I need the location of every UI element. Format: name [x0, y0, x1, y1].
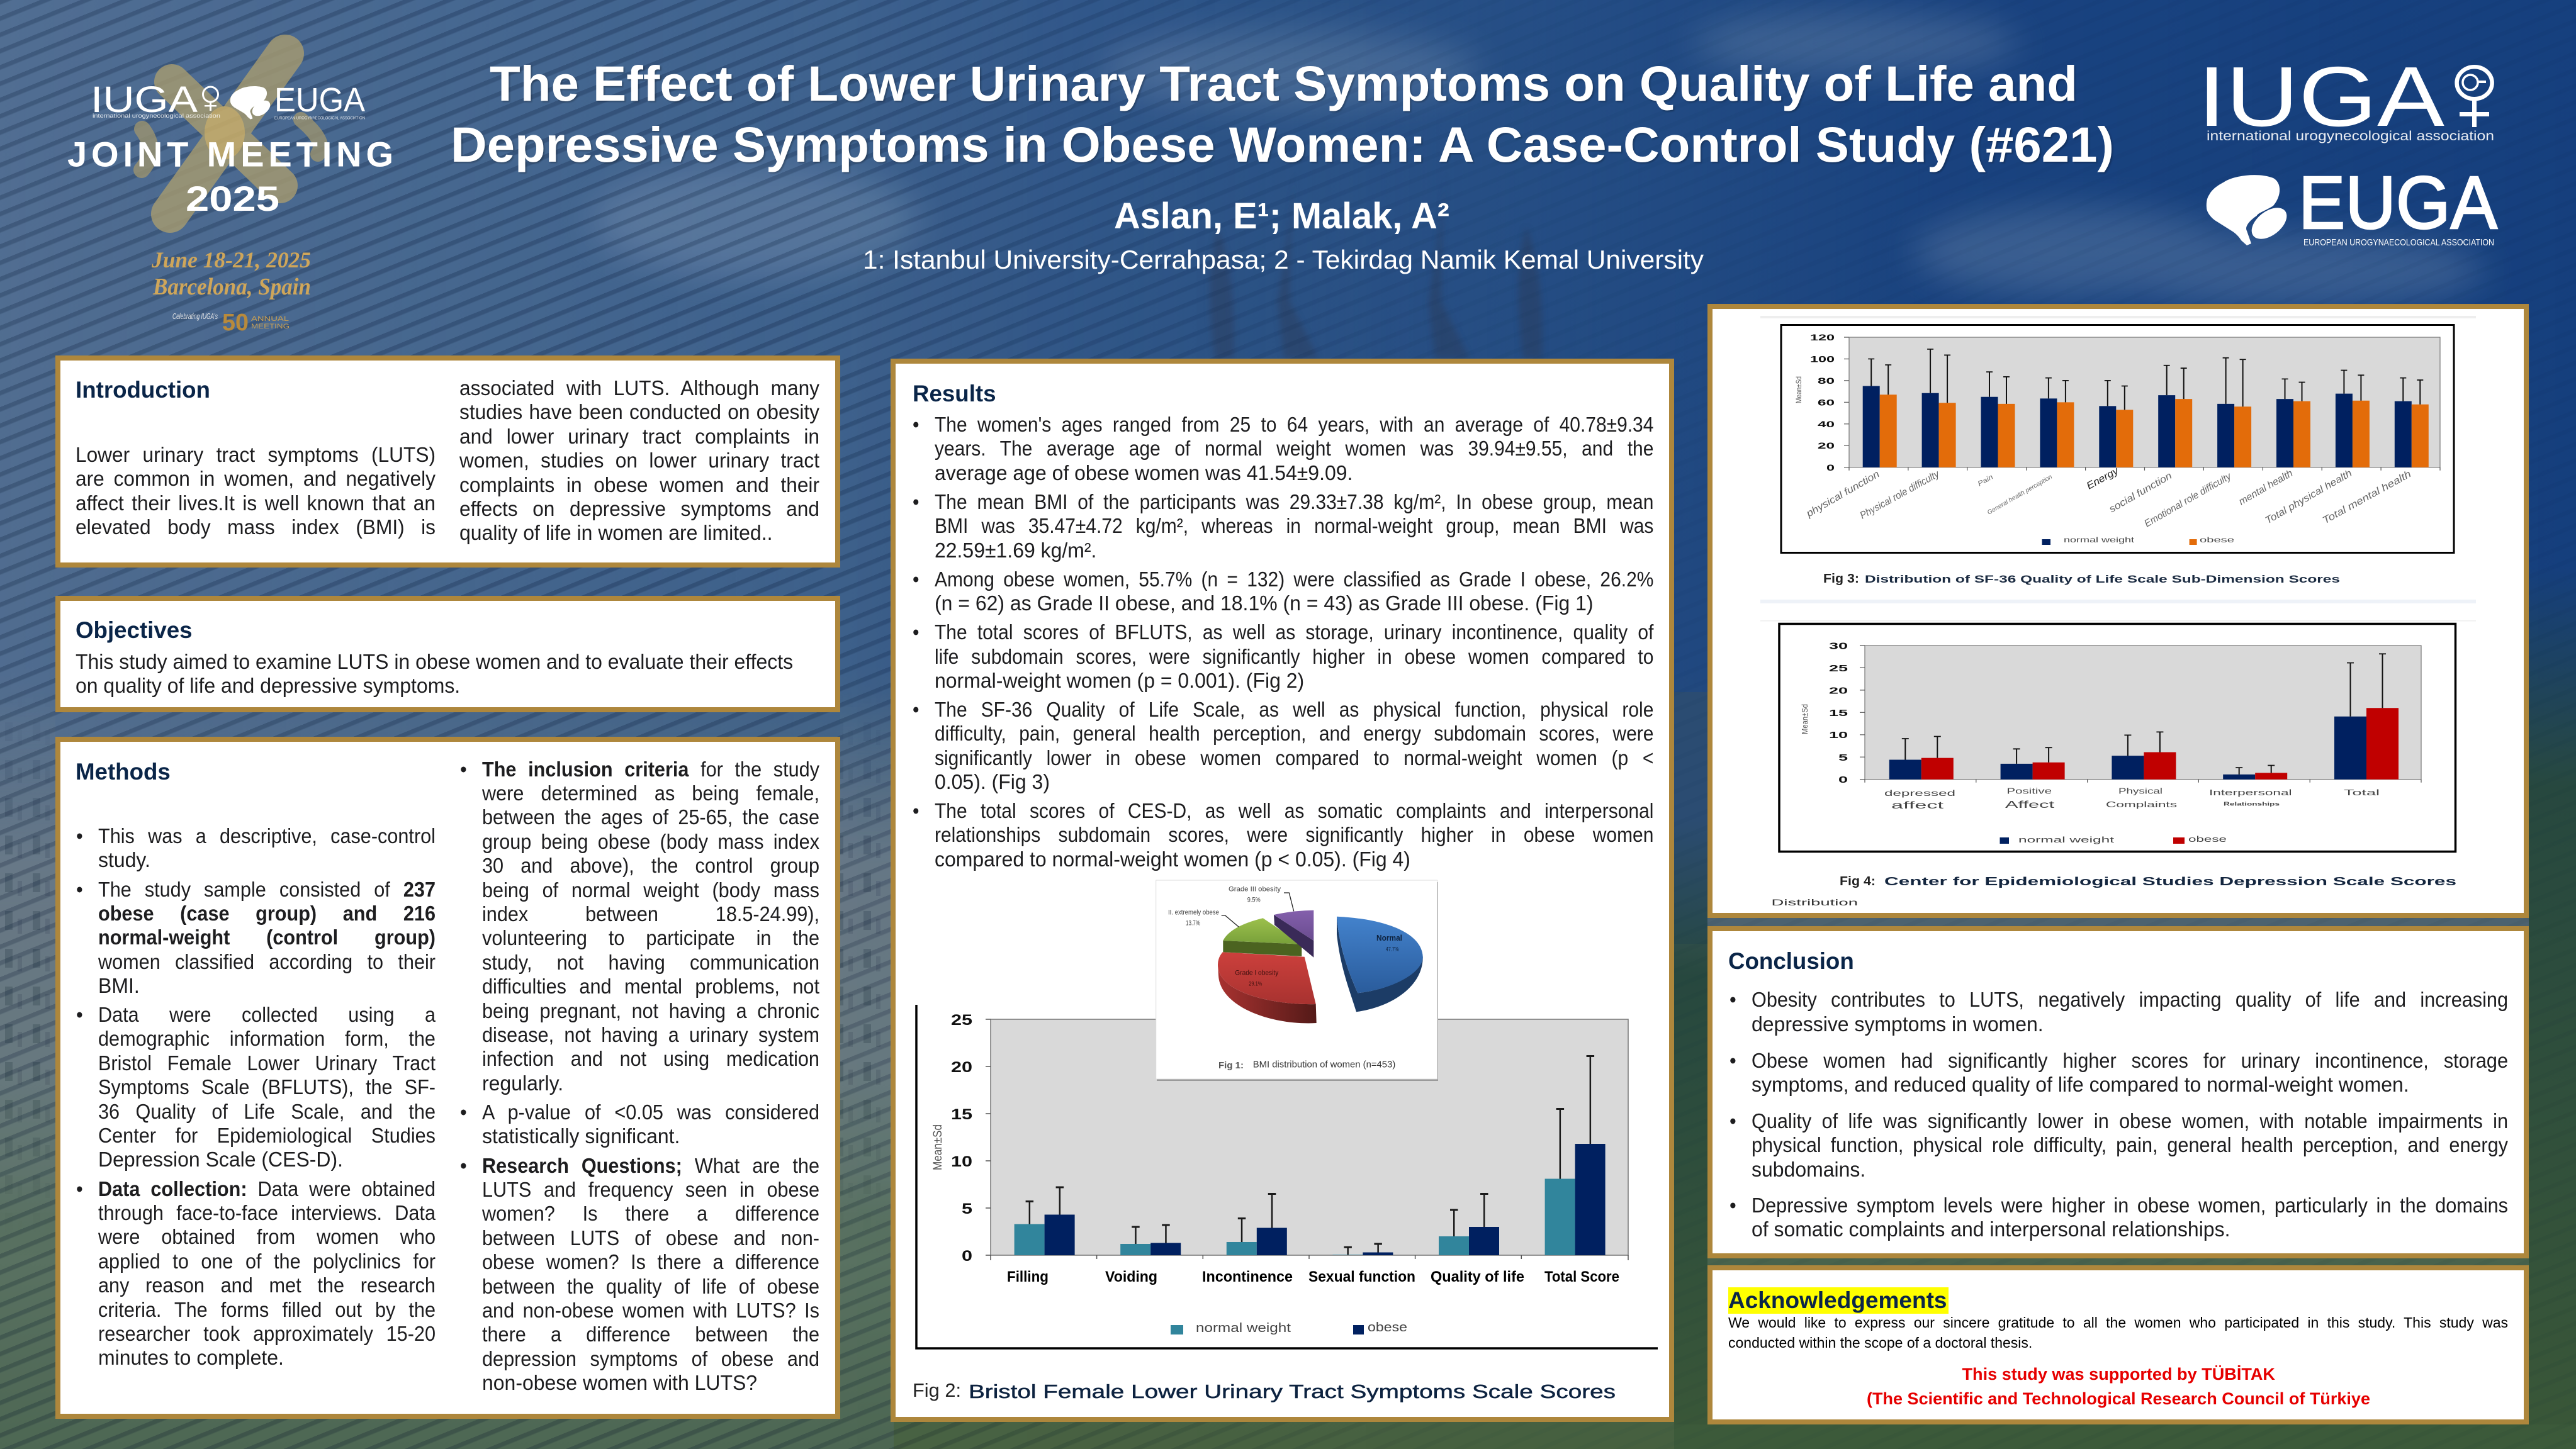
bullet: research questions: obese women? Is there a difference — [482, 1251, 819, 1274]
bullet: data collection: minutes to complete. — [98, 1346, 284, 1370]
legend: obese — [2188, 834, 2227, 844]
bullet: obesity grades — [935, 568, 1653, 617]
category labels: Positive — [2006, 786, 2052, 796]
bullet: obesity grades: Among obese women, 55.7% (n = 132) were classified as Grade I obese, 26.2% — [935, 568, 1653, 591]
y axis labels: 40 — [1818, 419, 1835, 429]
bullet: instruments: Center for Epidemiological Studies — [98, 1124, 436, 1148]
small EUGA wordmark: EUGA — [274, 81, 365, 119]
bullet: inclusion criteria: 30 and above), the control group — [482, 854, 819, 878]
y axis labels — [1829, 641, 1848, 785]
small EUGA wordmark — [230, 81, 365, 121]
heading: Objectives: Objectives — [76, 617, 193, 643]
panel: acknowledgements — [1707, 1265, 2529, 1424]
bars: normal weight — [1863, 386, 2412, 467]
bullet: higher scores: Obese women had significantly higher scores for urinary incontinence, storage — [1752, 1049, 2508, 1073]
bars: normal weight — [1889, 717, 2366, 780]
category labels: Filling — [1007, 1268, 1049, 1285]
caption: figure 4 — [1771, 875, 2456, 907]
panel: methods: • — [76, 825, 83, 848]
category labels: physical function — [1804, 469, 1882, 520]
small IUGA wordmark: IUGA — [91, 79, 198, 120]
caption: figure 2 — [913, 1379, 1616, 1402]
small EUGA wordmark: EUROPEAN UROGYNAECOLOGICAL ASSOCIATION — [274, 116, 365, 121]
text: introduction left column — [76, 444, 436, 539]
bullet: quality of life: subdomains. — [1752, 1158, 1865, 1182]
bullet: instruments: demographic information form, the — [98, 1027, 436, 1051]
y axis labels: 0 — [1838, 775, 1848, 785]
text: 50th annual meeting badge: 50 — [222, 310, 249, 336]
bullet: data collection: any reason and met the research — [98, 1274, 436, 1297]
pie slice: normal — [1337, 917, 1423, 1012]
bullet: BMI — [935, 491, 1653, 563]
legend — [1171, 1321, 1407, 1335]
chart: figure 1 BMI pie chart card — [1156, 880, 1438, 1081]
category labels: Affect — [2005, 800, 2055, 810]
y axis labels: 10 — [951, 1153, 972, 1170]
bullet: obesity contributes: Obesity contributes to LUTS, negatively impacting quality of life and increasing — [1752, 988, 2508, 1012]
text: 50th annual meeting badge: ANNUAL — [251, 315, 289, 323]
panel: methods: • — [460, 758, 467, 781]
heading: Results: Results — [913, 381, 996, 406]
bullet: p-value: statistically significant. — [482, 1125, 680, 1148]
text: funding note — [1867, 1365, 2370, 1408]
heading: Acknowledgements: Acknowledgements — [1728, 1287, 1947, 1313]
text: introduction right column: complaints in obese women and their — [459, 474, 819, 497]
bullet: study sample: women classified according to their — [98, 951, 436, 974]
pie slice: grade I obesity — [1218, 952, 1317, 1023]
bullet: inclusion criteria: regularly. — [482, 1072, 563, 1095]
panel: methods: • — [460, 1155, 467, 1178]
bullet: study sample — [76, 878, 436, 998]
bullet: study sample: BMI. — [98, 975, 140, 998]
bullet: BFLUTS — [935, 621, 1653, 694]
category labels: Pain — [1976, 473, 1994, 488]
conference logo: IUGA EUGA Joint Meeting 2025 — [67, 53, 393, 336]
caption: figure 2: Bristol Female Lower Urinary Tract Symptoms Scale Scores — [969, 1380, 1616, 1402]
bullet: study design: This was a descriptive, case-control — [98, 825, 436, 848]
bars: obese — [1921, 708, 2399, 780]
category labels: General health perception — [1986, 473, 2054, 517]
bullet: ages — [913, 413, 1653, 485]
text: introduction right column: effects on depressive symptoms and — [459, 498, 819, 521]
text: acknowledgements: We would like to express our sincere gratitude to all the women who participated in this study. This study was — [1728, 1314, 2508, 1331]
bullet: instruments — [76, 1004, 436, 1172]
text: objectives: on quality of life and depressive symptoms. — [76, 674, 460, 698]
panel: conclusion: • — [1730, 1049, 1736, 1073]
logo: EUGA: EUROPEAN UROGYNAECOLOGICAL ASSOCIATION — [2303, 237, 2494, 248]
text: Joint Meeting 2025: 2025 — [186, 179, 279, 218]
legend — [2042, 535, 2235, 545]
category labels: Total physical health — [2263, 468, 2354, 526]
pie labels: 29.1% — [1249, 981, 1262, 987]
bullet: inclusion criteria: between the ages of 25-65, the case — [482, 806, 819, 829]
y axis labels: 80 — [1818, 376, 1835, 386]
bullet: instruments: Symptoms Scale (BFLUTS), the SF- — [98, 1076, 436, 1099]
bullet: research questions: women? Is there a difference — [482, 1202, 819, 1226]
category labels: Interpersonal — [2209, 788, 2292, 797]
pie slice: grade III obesity — [1274, 910, 1313, 958]
bullet: CES-D — [935, 800, 1653, 872]
category labels: Physical — [2118, 786, 2163, 796]
panel: methods: • — [76, 1178, 83, 1200]
logo: IUGA: IUGA — [2198, 49, 2444, 144]
caption: figure 3: Distribution of SF-36 Quality of Life Scale Sub-Dimension Scores — [1865, 573, 2340, 585]
bullet: ages: years. The average age of normal weight women was 39.94±9.55, and the — [935, 437, 1653, 461]
bars: normal weight — [1015, 1179, 1575, 1255]
heading: Introduction: Introduction — [76, 377, 210, 403]
text: introduction right column: associated with LUTS. Although many — [459, 377, 819, 400]
text: introduction right column: and lower urinary tract complaints in — [459, 425, 819, 449]
caption: figure 1: BMI distribution of women (n=453) — [1253, 1060, 1395, 1070]
error bars — [1868, 349, 2423, 410]
text: funding note: (The Scientific and Technological Research Council of Türkiye — [1867, 1389, 2370, 1408]
panel: results — [891, 359, 1674, 1422]
text: introduction right column — [459, 377, 819, 545]
bullet: inclusion criteria: being pregnant, not having a chronic — [482, 1000, 819, 1023]
category labels: Physical role difficulty — [1859, 469, 1942, 521]
bullet: quality of life: physical function, physical role difficulty, pain, general health perception, and energy — [1752, 1134, 2508, 1157]
text: acknowledgements — [1728, 1313, 2508, 1353]
bullet: study design — [76, 825, 436, 872]
bullet: research questions: Research Questions; What are the — [482, 1155, 819, 1178]
y axis labels: 5 — [962, 1200, 972, 1217]
category labels — [1884, 786, 2380, 811]
bullet: inclusion criteria: difficulties and mental problems, not — [482, 975, 819, 999]
bullet: data collection: applied to one of the polyclinics for — [98, 1250, 436, 1273]
y axis labels: 25 — [951, 1012, 972, 1029]
pie slice: extremely obese — [1223, 918, 1302, 956]
bullet: depressive symptoms: Depressive symptom levels were higher in obese women, particularly in the domains — [1752, 1194, 2508, 1217]
panel: introduction — [55, 355, 840, 568]
bullet: SF-36: 0.05). (Fig 3) — [935, 771, 1050, 794]
authors: Aslan, E¹; Malak, A² — [1114, 196, 1449, 237]
pie labels: Normal — [1376, 933, 1402, 943]
pie labels: 13.7% — [1186, 920, 1200, 927]
bars: obese — [1880, 394, 2429, 467]
category labels: Energy — [2085, 465, 2121, 491]
bullet: inclusion criteria: being of normal weight (body mass — [482, 879, 819, 902]
bullet: research questions: there a difference between the — [482, 1323, 819, 1346]
title — [451, 55, 2114, 172]
text: introduction right column: women, studies on lower urinary tract — [459, 449, 819, 473]
y axis labels: 15 — [1829, 708, 1848, 719]
category labels — [1804, 465, 2413, 529]
bullet: SF-36: difficulty, pain, general health perception, and energy subdomain scores, were — [935, 722, 1653, 746]
heading: Methods: Methods — [76, 759, 171, 785]
category labels: Emotional role difficulty — [2142, 471, 2234, 529]
bullet: research questions: and non-obese women with LUTS? Is — [482, 1299, 819, 1323]
affiliations: 1: Istanbul University-Cerrahpasa; 2 - Tekirdag Namik Kemal University — [863, 245, 1704, 274]
bullet: research questions: LUTS and frequency seen in obese — [482, 1178, 819, 1202]
legend: normal weight — [1196, 1321, 1291, 1335]
bullet: BMI: The mean BMI of the participants was 29.33±7.38 kg/m², In obese group, mean — [935, 491, 1653, 514]
y axis labels: 0 — [962, 1248, 972, 1265]
pie labels: Grade I obesity — [1235, 969, 1279, 976]
text: introduction left column: Lower urinary tract symptoms (LUTS) — [76, 444, 436, 467]
bullet: p-value: A p-value of <0.05 was considered — [482, 1101, 819, 1124]
y axis labels — [951, 1012, 972, 1265]
pie labels: Grade III obesity — [1229, 886, 1281, 893]
caption: figure 3 — [1823, 572, 2340, 586]
text: funding note: This study was supported by TÜBİTAK — [1962, 1365, 2275, 1384]
text: objectives — [76, 651, 793, 698]
y axis labels — [1810, 332, 1835, 473]
panel: methods: • — [76, 878, 83, 901]
bars: obese — [1045, 1144, 1606, 1255]
bullet: study design: study. — [98, 849, 150, 872]
text: objectives: This study aimed to examine LUTS in obese women and to evaluate their effects — [76, 651, 793, 674]
bullet: data collection: Data collection: Data were obtained — [98, 1178, 436, 1200]
bullet: inclusion criteria — [460, 758, 819, 1095]
category labels: Incontinence — [1202, 1268, 1293, 1285]
bullet: data collection — [76, 1178, 436, 1370]
bullet: instruments: Data were collected using a — [98, 1004, 436, 1027]
bullet: inclusion criteria: were determined as being female, — [482, 782, 819, 805]
category labels: Total — [2344, 788, 2380, 797]
text: introduction left column: elevated body mass index (BMI) is — [76, 516, 436, 539]
panel: conclusion: • — [1730, 1194, 1736, 1217]
pie labels — [1168, 886, 1402, 987]
error bars — [1026, 1055, 1594, 1255]
bullet: obesity contributes: depressive symptoms in women. — [1752, 1013, 2043, 1036]
bullet: depressive symptoms — [1752, 1194, 2508, 1243]
y axis labels: 30 — [1829, 641, 1848, 652]
bullet: research questions — [460, 1155, 819, 1395]
text: date and place: June 18-21, 2025 — [151, 247, 311, 272]
caption: figure 1: Fig 1: — [1218, 1060, 1244, 1071]
category labels: Complaints — [2106, 800, 2178, 809]
bullet: BFLUTS: life subdomain scores, were significantly higher in obese women compared to — [935, 646, 1653, 669]
y axis labels: 10 — [1829, 730, 1848, 741]
bullet: BMI: 22.59±1.69 kg/m². — [935, 539, 1096, 562]
pie labels: 47.7% — [1386, 946, 1399, 953]
y axis labels: 100 — [1810, 354, 1835, 364]
title: The Effect of Lower Urinary Tract Symptoms on Quality of Life and — [490, 55, 2078, 111]
bullet: inclusion criteria: volunteering to participate in the — [482, 927, 819, 950]
panel: conclusion: • — [1730, 1110, 1736, 1133]
legend: obese — [2200, 535, 2235, 544]
panel: results: • — [913, 800, 919, 823]
bullet: obesity contributes — [1752, 988, 2508, 1037]
y axis labels: 20 — [1818, 440, 1835, 450]
text: introduction left column: affect their lives.It is well known that an — [76, 492, 436, 515]
category labels: Total Score — [1544, 1268, 1619, 1285]
bullet: study sample: obese (case group) and 216 — [98, 902, 436, 926]
bullet: higher scores — [1752, 1049, 2508, 1097]
bullet: SF-36: significantly lower in obese women compared to normal-weight women (p < — [935, 747, 1653, 770]
bullet: data collection: were obtained from women who — [98, 1226, 436, 1249]
text: introduction right column: studies have been conducted on obesity — [459, 401, 819, 424]
category labels: Relationships — [2224, 802, 2280, 807]
error bars — [1902, 653, 2386, 775]
panel: conclusion — [1707, 926, 2529, 1258]
logo: EUGA: EUGA — [2298, 161, 2498, 245]
legend: normal weight — [2064, 535, 2135, 544]
bullet: instruments: 36 Quality of Life Scale, and the — [98, 1100, 436, 1124]
category labels: depressed — [1884, 788, 1955, 798]
chart: figure 3 SF-36 bar chart — [1760, 316, 2476, 603]
bullet: inclusion criteria: The inclusion criteria for the study — [482, 758, 819, 781]
category labels: mental health — [2237, 468, 2295, 507]
bullet: instruments: Depression Scale (CES-D). — [98, 1148, 343, 1172]
y axis labels: 5 — [1838, 752, 1848, 763]
caption: figure 2: Fig 2: — [913, 1379, 961, 1401]
text: introduction left column: are common in women, and negatively — [76, 467, 436, 491]
text: Joint Meeting 2025 — [67, 135, 393, 218]
text: 50th annual meeting badge — [172, 310, 290, 336]
title: Depressive Symptoms in Obese Women: A Case-Control Study (#621) — [451, 116, 2114, 172]
legend: normal weight — [2018, 835, 2115, 844]
bullet: ages: average age of obese women was 41.54±9.09. — [935, 462, 1353, 485]
y axis labels: 20 — [951, 1059, 972, 1076]
bullet: depressive symptoms: of somatic complaints and interpersonal relationships. — [1752, 1218, 2230, 1241]
panel: results: • — [913, 568, 919, 591]
text: 50th annual meeting badge: Celebrating IUGA's — [172, 311, 218, 321]
bullet: data collection: criteria. The forms filled out by the — [98, 1299, 436, 1322]
bullet: BFLUTS: normal-weight women (p = 0.001). (Fig 2) — [935, 669, 1304, 693]
text: Joint Meeting 2025: JOINT MEETING — [67, 135, 393, 174]
small IUGA wordmark — [91, 79, 220, 120]
y axis labels: 120 — [1810, 332, 1835, 342]
category labels: Voiding — [1105, 1268, 1157, 1285]
small IUGA wordmark: international urogynecological association — [93, 113, 220, 119]
bullet: ages: The women's ages ranged from 25 to 64 years, with an average of 40.78±9.34 — [935, 413, 1653, 437]
bullet: obesity grades: (n = 62) as Grade II obese, and 18.1% (n = 43) as Grade III obese. (Fig 1) — [935, 592, 1593, 615]
bullet: research questions: non-obese women with LUTS? — [482, 1372, 757, 1395]
logo: EUGA — [2207, 161, 2498, 248]
bullet: quality of life — [1752, 1110, 2508, 1182]
bullet: data collection: researcher took approximately 15-20 — [98, 1323, 436, 1346]
chart: figure 4 CES-D bar chart — [1760, 620, 2476, 907]
bullet: BFLUTS: The total scores of BFLUTS, as well as storage, urinary incontinence, quality of — [935, 621, 1653, 644]
bullet: research questions: between LUTS of obese and non- — [482, 1227, 819, 1250]
category labels — [1007, 1268, 1619, 1285]
y axis labels: 15 — [951, 1106, 972, 1123]
y axis labels: 0 — [1826, 462, 1835, 473]
bullet: inclusion criteria: group being obese (body mass index — [482, 831, 819, 854]
logo: IUGA: international urogynecological association — [2207, 129, 2494, 143]
chart: figure 2 BFLUTS bar chart — [913, 1005, 1658, 1402]
bullet: higher scores: symptoms, and reduced quality of life compared to normal-weight women. — [1752, 1073, 2409, 1097]
y axis labels: 20 — [1829, 686, 1848, 696]
y axis title: Mean±Sd — [1794, 376, 1803, 403]
category labels: Quality of life — [1431, 1268, 1524, 1285]
bullet: research questions: between the quality of life of obese — [482, 1275, 819, 1299]
pie labels: 9.5% — [1247, 896, 1261, 904]
panel: results: • — [913, 698, 919, 722]
legend: obese — [1368, 1321, 1407, 1334]
caption: figure 3: Fig 3: — [1823, 572, 1859, 586]
text: date and place: Barcelona, Spain — [152, 274, 311, 300]
panel: results: • — [913, 621, 919, 644]
y axis title: Mean±Sd — [1800, 704, 1809, 734]
text: introduction right column: quality of life in women are limited.. — [459, 522, 772, 545]
bullet: SF-36 — [935, 698, 1653, 795]
panel: results: • — [913, 491, 919, 514]
bullet: CES-D: compared to normal-weight women (p < 0.05). (Fig 4) — [935, 848, 1410, 871]
pie labels: II. extremely obese — [1168, 909, 1219, 916]
caption: figure 4: Fig 4: — [1840, 875, 1876, 888]
y axis title: Mean±Sd — [931, 1124, 945, 1170]
text: date and place — [151, 247, 311, 300]
bullet: study sample: The study sample consisted of 237 — [98, 878, 436, 901]
panel: methods: • — [460, 1101, 467, 1124]
bullet: quality of life: Quality of life was significantly lower in obese women, with notable impairments in — [1752, 1110, 2508, 1133]
panel: methods: • — [76, 1004, 83, 1027]
category labels: Sexual function — [1308, 1268, 1415, 1285]
icon: gold cross emblem — [142, 53, 320, 214]
bullet: inclusion criteria: index between 18.5-24.99), — [482, 903, 819, 926]
panel: figures 3 and 4 — [1707, 304, 2529, 918]
panel: objectives — [55, 596, 840, 712]
bullet: CES-D: The total scores of CES-D, as well as somatic complaints and interpersonal — [935, 800, 1653, 823]
category labels: Total mental health — [2321, 469, 2413, 526]
bullet: p-value — [460, 1101, 819, 1148]
bullet: SF-36: The SF-36 Quality of Life Scale, as well as physical function, physical role — [935, 698, 1653, 722]
panel: conclusion: • — [1730, 988, 1736, 1012]
category labels: social function — [2107, 471, 2174, 515]
category labels: affect — [1891, 800, 1944, 811]
bullet: data collection: through face-to-face interviews. Data — [98, 1202, 436, 1225]
caption: figure 4: Center for Epidemiological Studies Depression Scale Scores — [1884, 875, 2456, 888]
legend — [2000, 834, 2227, 844]
text: 50th annual meeting badge: MEETING — [251, 323, 290, 330]
bullet: inclusion criteria: study, not having communication — [482, 951, 819, 975]
bullet: BMI: BMI was 35.47±4.72 kg/m², whereas in normal-weight group, mean BMI was — [935, 515, 1653, 538]
panel: methods — [55, 737, 840, 1419]
caption: figure 4: Distribution — [1771, 897, 1858, 907]
y axis labels: 60 — [1818, 397, 1835, 407]
text: acknowledgements: conducted within the scope of a doctoral thesis. — [1728, 1334, 2032, 1351]
bullet: instruments: Bristol Female Lower Urinary Tract — [98, 1052, 436, 1075]
bullet: inclusion criteria: infection and not using medication — [482, 1048, 819, 1071]
bullet: CES-D: relationships subdomain scores, were significantly higher in obese women — [935, 824, 1653, 847]
heading: Conclusion: Conclusion — [1728, 948, 1854, 974]
bullet: study sample: normal-weight (control group) — [98, 926, 436, 949]
y axis labels: 25 — [1829, 663, 1848, 674]
bullet: research questions: depression symptoms of obese and — [482, 1348, 819, 1371]
bullet: inclusion criteria: disease, not having a urinary system — [482, 1024, 819, 1047]
panel: results: • — [913, 413, 919, 437]
